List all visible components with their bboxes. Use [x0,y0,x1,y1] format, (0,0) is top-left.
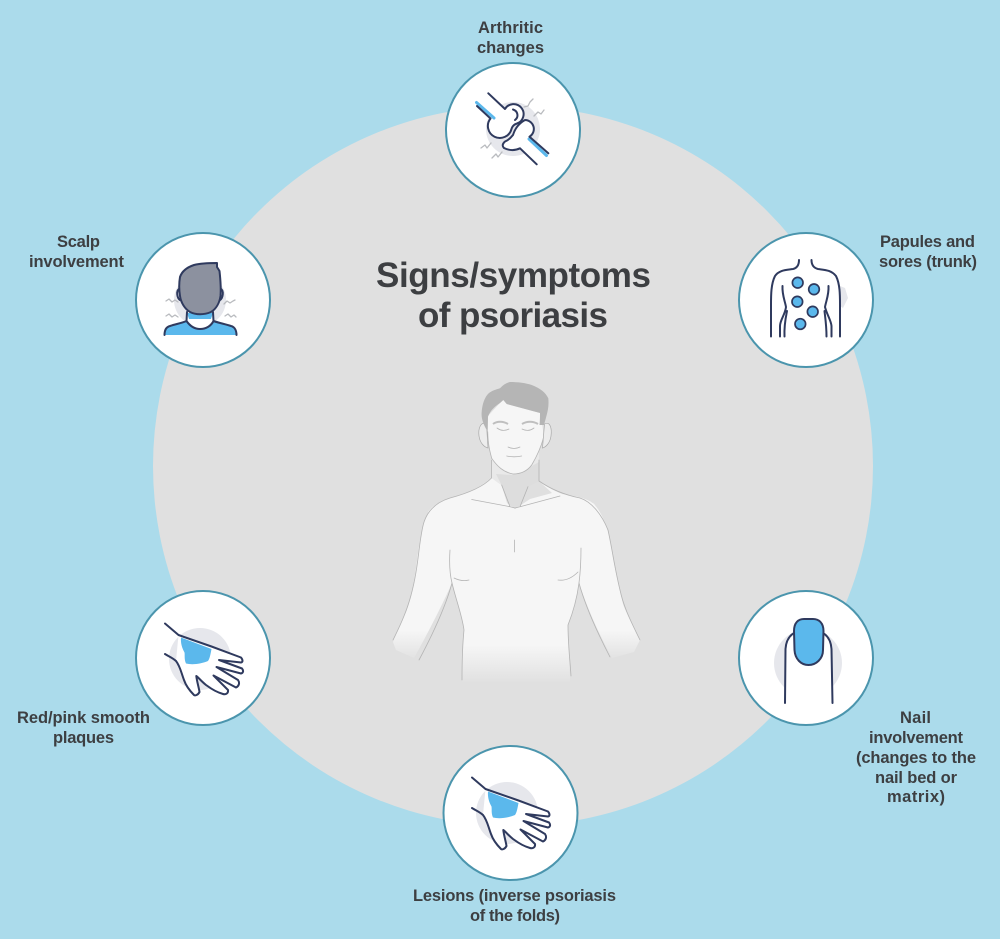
title: of psoriasis [418,296,608,335]
label: nail involvement: (changes to the [856,749,976,767]
label: lesions: of the folds) [470,907,560,925]
eyebrows [493,422,538,424]
ears [177,289,223,300]
label: red/pink smooth plaques [17,709,150,747]
central human figure [393,382,640,682]
label: lesions [413,887,616,925]
neck [492,445,539,506]
face [487,400,543,474]
label: papules and sores: Papules and [880,233,975,251]
label: papules and sores [879,233,977,271]
label: nail involvement: matrix) [887,788,945,806]
hair [482,382,549,432]
label: nail involvement: nail bed or [875,769,958,787]
central grey circle [153,106,873,826]
icon: scalp involvement [136,233,270,367]
torso [428,470,595,682]
icon: nail involvement [739,591,873,725]
label: papules and sores: sores (trunk) [879,253,977,271]
body outlines [393,428,640,680]
label: nail involvement: Nail [900,709,931,727]
label: red/pink smooth plaques: plaques [53,729,114,747]
label: arthritic changes [477,19,544,57]
icon: papules and sores (trunk) [739,233,873,367]
title: Signs/symptoms [376,256,651,295]
icon: lesions hand [444,746,578,880]
label: arthritic changes: changes [477,39,544,57]
left arm [393,510,470,658]
title [376,256,651,335]
label: lesions: Lesions (inverse psoriasis [413,887,616,905]
shoulders [164,321,236,335]
upper bone fill [477,93,524,138]
icon: red/pink smooth plaques hand [136,591,270,725]
icon: arthritic changes [446,63,580,197]
label: red/pink smooth plaques: Red/pink smooth [17,709,150,727]
label: nail involvement [856,709,976,806]
label: scalp involvement: involvement [29,253,124,271]
label: arthritic changes: Arthritic [478,19,543,37]
right arm [560,503,640,658]
label: scalp involvement: Scalp [57,233,100,251]
ears [479,423,488,448]
papules [792,277,819,329]
label: nail involvement: involvement [869,729,964,747]
label: scalp involvement [29,233,124,271]
hair [179,263,221,314]
lower bone fill [503,120,548,164]
neck [187,312,213,329]
